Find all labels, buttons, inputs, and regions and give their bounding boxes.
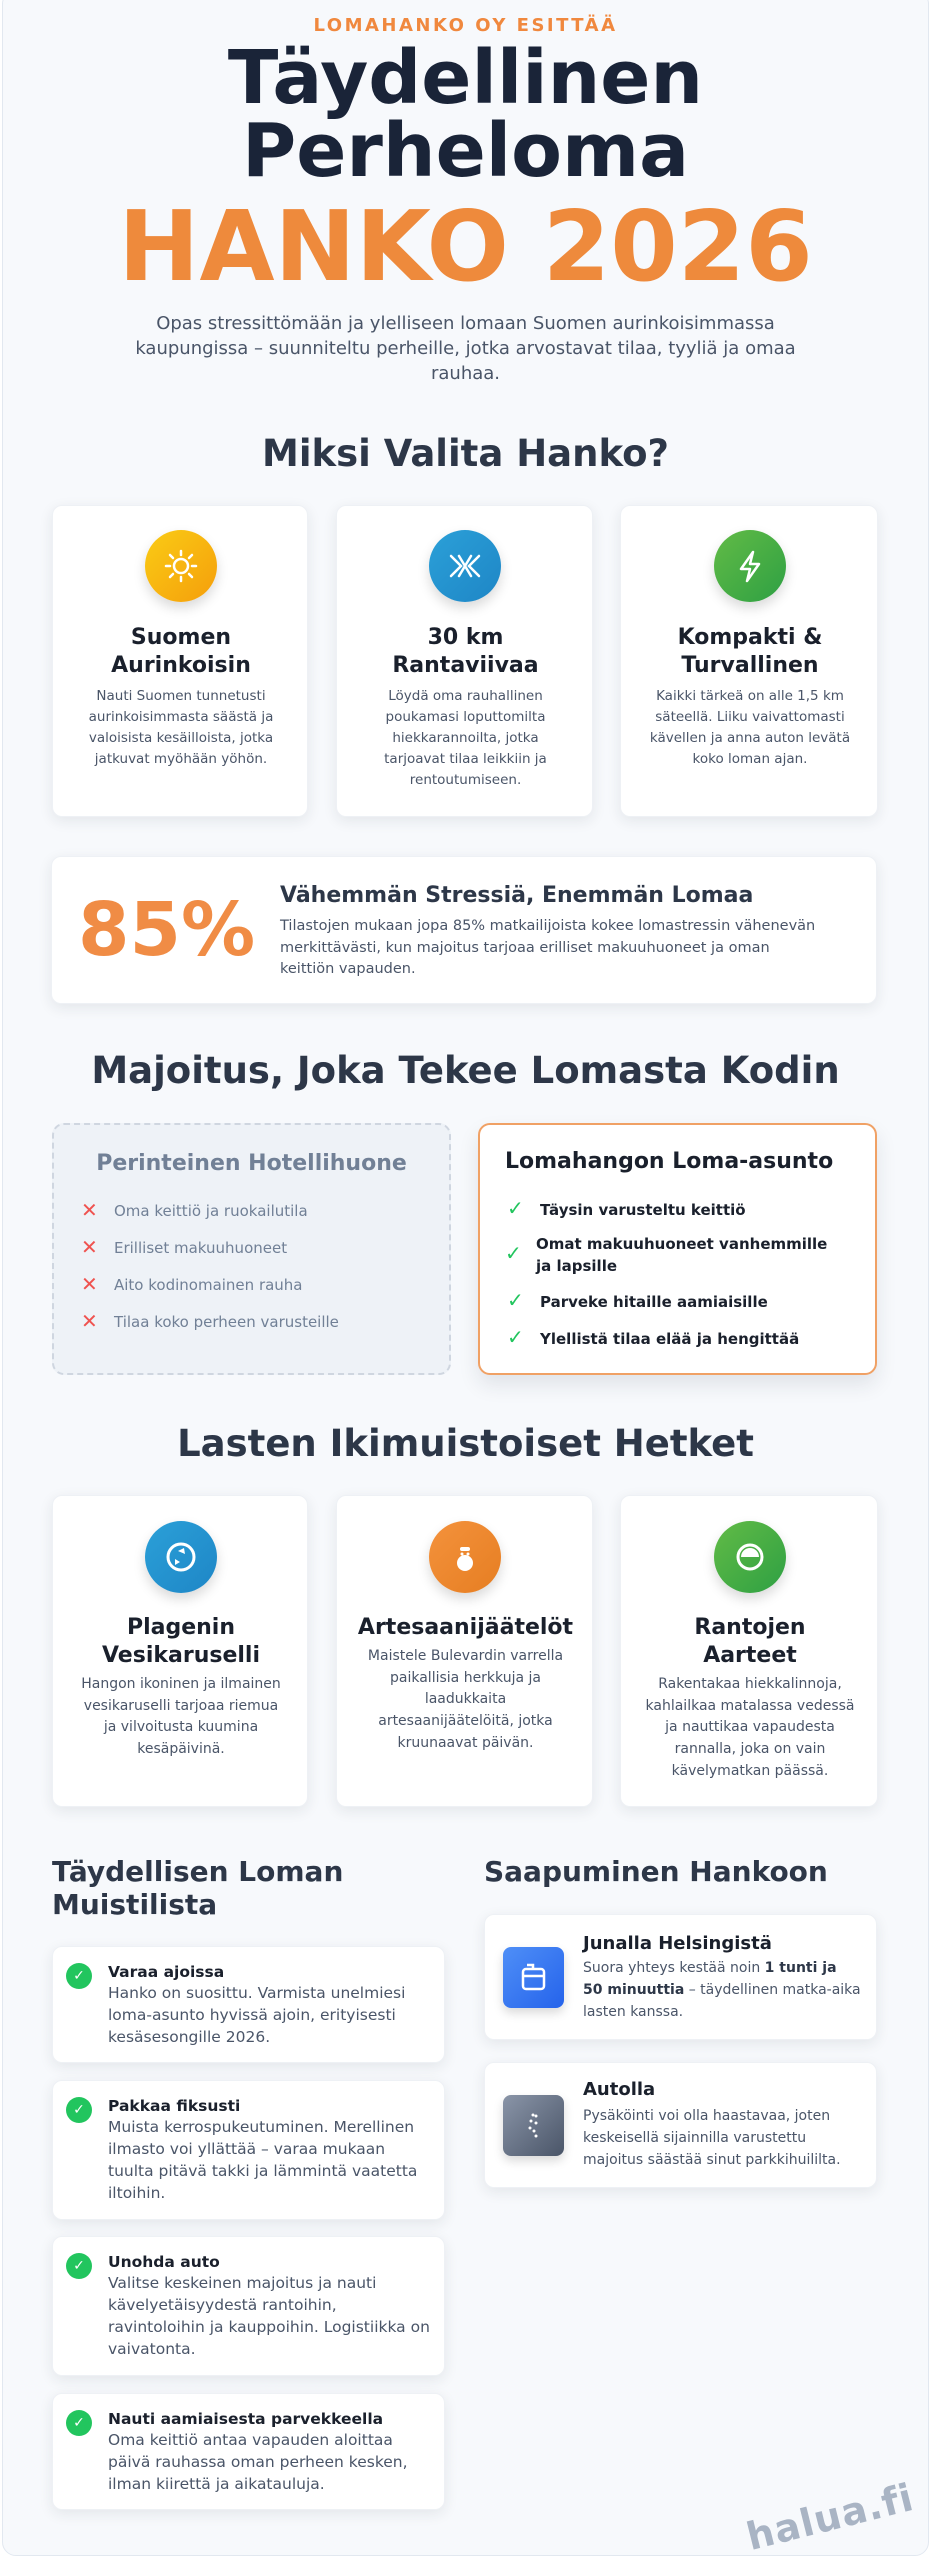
heading: Lasten: Lasten Ikimuistoiset Hetket bbox=[177, 1422, 754, 1465]
card: compact bbox=[620, 505, 878, 817]
card: water carousel bbox=[52, 1495, 308, 1807]
heading: Miksi Valita Hanko: Miksi Valita Hanko? bbox=[262, 432, 669, 475]
stats card bbox=[51, 856, 877, 1004]
panel: holiday apartment: Parveke hitaille aamiaisille bbox=[540, 1293, 768, 1311]
icon: sun bbox=[145, 530, 217, 602]
panel: kids cards bbox=[51, 1495, 879, 1812]
arrival: train: 50 minuuttia – täydellinen matka‑aika lasten kanssa. bbox=[583, 1982, 861, 2020]
stat text: Tilastojen mukaan jopa 85% matkailijoista kokee lomastressin vähenevän merkittävästi, kun majoitus tarjoaa erilliset makuuhuoneet ja oman keittiön vapauden. bbox=[280, 918, 815, 977]
eyebrow: LOMAHANKO OY ESITTÄÄ bbox=[313, 15, 618, 36]
arrival: car: Autolla bbox=[583, 2079, 655, 2100]
title: HANKO 2026: HANKO 2026 bbox=[118, 190, 813, 303]
panel: arrival bbox=[483, 1914, 878, 2193]
heading: checklist bbox=[52, 1855, 343, 1921]
card: ice cream bbox=[336, 1495, 593, 1807]
panel: holiday apartment: ✓ bbox=[507, 1288, 524, 1312]
card: coastline: Löydä oma rauhallinen poukamasi loputtomilta hiekkarannoilta, jotka tarjoavat tilaa leikkiin ja rentoutumiseen. bbox=[384, 688, 547, 788]
card: water carousel: Vesikaruselli bbox=[102, 1643, 260, 1668]
icon: car bbox=[503, 2095, 564, 2156]
panel: hotel room bbox=[52, 1123, 451, 1375]
checklist item 3: Valitse keskeinen majoitus ja nauti kävelyetäisyydestä rantoihin, ravintoloihin ja kauppoihin. Logistiikka on vaivatonta. bbox=[108, 2274, 430, 2358]
panel: holiday apartment bbox=[478, 1123, 877, 1375]
arrival: train bbox=[484, 1914, 877, 2040]
panel: holiday apartment: Ylellistä tilaa elää ja hengittää bbox=[540, 1330, 799, 1348]
checklist item 2: Pakkaa fiksusti bbox=[108, 2097, 240, 2115]
icon: lightning bbox=[714, 530, 786, 602]
panel: why cards bbox=[51, 505, 879, 822]
title: Täydellinen bbox=[228, 35, 703, 121]
title: Perheloma bbox=[242, 108, 689, 194]
icon: train bbox=[503, 1947, 564, 2008]
card: water carousel: Plagenin bbox=[127, 1615, 235, 1640]
card: ice cream: Maistele Bulevardin varrella paikallisia herkkuja ja laadukkaita artesaanijäätelöitä, jotka kruunaavat päivän. bbox=[368, 1648, 563, 1751]
card: coastline: 30 km bbox=[428, 625, 503, 650]
heading: Majoitus: Majoitus, Joka Tekee Lomasta Kodin bbox=[91, 1049, 840, 1092]
icon: carousel bbox=[145, 1521, 217, 1593]
card: sun: Nauti Suomen tunnetusti aurinkoisimmasta säästä ja valoisista kesäilloista, jotka jatkuvat myöhään yöhön. bbox=[89, 688, 273, 767]
arrival: train: Suora yhteys kestää noin 1 tunti ja bbox=[583, 1960, 837, 1976]
panel: holiday apartment: ✓ bbox=[507, 1196, 524, 1220]
panel: holiday apartment: Lomahangon Loma-asunto bbox=[505, 1149, 833, 1174]
heading: checklist: Muistilista bbox=[52, 1888, 217, 1921]
checklist item 1: ✓ bbox=[73, 1968, 85, 1984]
panel: holiday apartment: ✓ bbox=[505, 1241, 522, 1265]
checklist item 2: ✓ bbox=[73, 2102, 85, 2118]
card: compact: Kaikki tärkeä on alle 1,5 km säteellä. Liiku vaivattomasti kävellen ja anna auton levätä koko loman ajan. bbox=[650, 688, 850, 767]
checklist item 3 bbox=[52, 2236, 445, 2376]
checklist item 1: Varaa ajoissa bbox=[108, 1963, 224, 1981]
checklist item 1: Hanko on suosittu. Varmista unelmiesi loma-asunto hyvissä ajoin, erityisesti kesäsesongille 2026. bbox=[108, 1984, 405, 2046]
subtitle: Opas stressittömään ja ylelliseen lomaan Suomen aurinkoisimmassa kaupungissa – suunniteltu perheille, jotka arvostavat tilaa, tyyliä ja omaa rauhaa. bbox=[135, 313, 796, 384]
card: beach treasures: Rantojen bbox=[694, 1615, 806, 1640]
checklist item 3: ✓ bbox=[73, 2258, 85, 2274]
panel: hotel room: Tilaa koko perheen varusteille bbox=[114, 1313, 339, 1331]
checklist item 2 bbox=[52, 2080, 445, 2220]
panel: hotel room: Oma keittiö ja ruokailutila bbox=[114, 1202, 308, 1220]
heading: checklist: Täydellisen Loman bbox=[52, 1855, 343, 1888]
panel: checklist bbox=[51, 1946, 446, 2515]
arrival: train: Junalla Helsingistä bbox=[583, 1933, 772, 1954]
card: beach treasures: Rakentakaa hiekkalinnoja, kahlailkaa matalassa vedessä ja nauttikaa vapaudesta rannalla, joka on vain kävelymatkan päässä. bbox=[646, 1676, 854, 1779]
card: beach treasures: Aarteet bbox=[703, 1643, 797, 1668]
icon: ice cream bbox=[429, 1521, 501, 1593]
checklist item 4: ✓ bbox=[73, 2415, 85, 2431]
card: coastline bbox=[336, 505, 593, 817]
checklist item 2: Muista kerrospukeutuminen. Merellinen ilmasto voi yllättää – varaa mukaan tuulta pitävä takki ja lämmintä vaatetta iltoihin. bbox=[108, 2118, 417, 2202]
icon: shell bbox=[714, 1521, 786, 1593]
panel: holiday apartment: Täysin varusteltu keittiö bbox=[540, 1201, 746, 1219]
card: beach treasures bbox=[620, 1495, 878, 1807]
card: coastline: Rantaviivaa bbox=[392, 653, 539, 678]
card: ice cream: Artesaanijäätelöt bbox=[358, 1615, 573, 1640]
panel: hotel room: Erilliset makuuhuoneet bbox=[114, 1239, 287, 1257]
panel: holiday apartment: Omat makuuhuoneet vanhemmille ja lapsille bbox=[536, 1235, 827, 1275]
card: compact: Kompakti & bbox=[678, 625, 822, 650]
stat heading: Vähemmän Stressiä, Enemmän Lomaa bbox=[280, 883, 753, 908]
title bbox=[228, 35, 703, 194]
checklist item 4: Oma keittiö antaa vapauden aloittaa päivä rauhassa oman perheen kesken, ilman kiirettä ja aikatauluja. bbox=[108, 2431, 408, 2493]
card: compact: Turvallinen bbox=[681, 653, 819, 678]
card: sun bbox=[52, 505, 308, 817]
watermark: halua.fi bbox=[742, 2475, 918, 2559]
stat: 85%: 85% bbox=[78, 887, 255, 973]
panel: hotel room: Aito kodinomainen rauha bbox=[114, 1276, 303, 1294]
panel: hotel room: ✕ bbox=[81, 1272, 98, 1296]
panel: hotel room: ✕ bbox=[81, 1235, 98, 1259]
checklist item 3: Unohda auto bbox=[108, 2253, 220, 2271]
card: water carousel: Hangon ikoninen ja ilmainen vesikaruselli tarjoaa riemua ja vilvoitusta kuumina kesäpäivinä. bbox=[81, 1676, 281, 1757]
heading: arrival: Saapuminen Hankoon bbox=[484, 1855, 828, 1888]
card: sun: Aurinkoisin bbox=[111, 653, 251, 678]
checklist item 1 bbox=[52, 1946, 445, 2063]
arrival: car: Pysäköinti voi olla haastavaa, joten keskeisellä sijainnilla varustettu majoitus säästää sinut parkkihuililta. bbox=[583, 2108, 841, 2168]
arrival: car bbox=[484, 2062, 877, 2188]
icon: waves bbox=[429, 530, 501, 602]
checklist item 4: Nauti aamiaisesta parvekkeella bbox=[108, 2410, 383, 2428]
panel: hotel room: Perinteinen Hotellihuone bbox=[96, 1151, 407, 1176]
checklist item 4 bbox=[52, 2393, 445, 2510]
card: sun: Suomen bbox=[131, 625, 231, 650]
panel: holiday apartment: ✓ bbox=[507, 1325, 524, 1349]
panel: hotel room: ✕ bbox=[81, 1309, 98, 1333]
panel: hotel room: ✕ bbox=[81, 1198, 98, 1222]
